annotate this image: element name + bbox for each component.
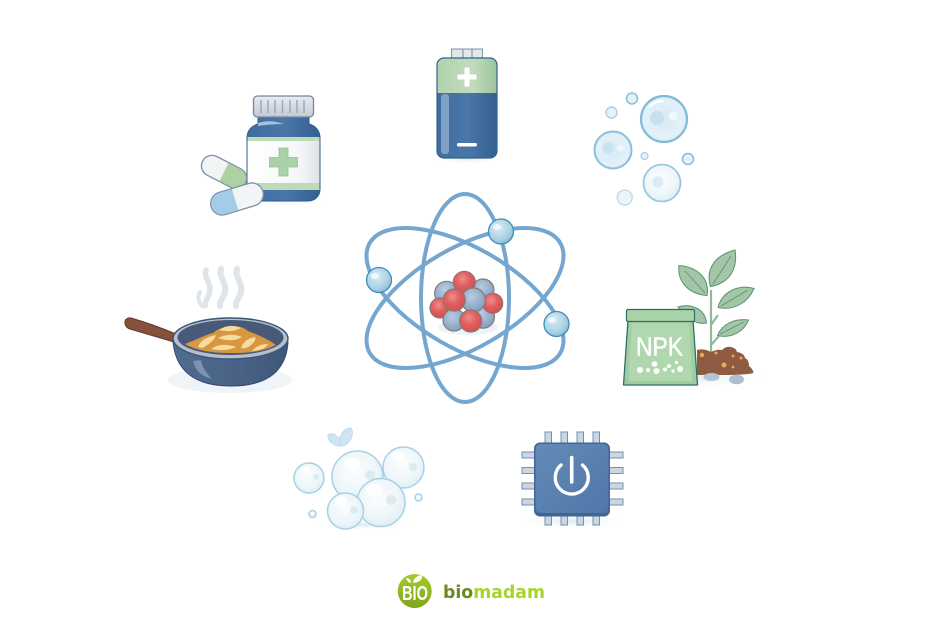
power symbol (555, 465, 588, 494)
icon: power chip (522, 432, 623, 528)
icon: soap bubbles cluster (294, 428, 424, 530)
orbits (345, 194, 585, 402)
handle (125, 318, 176, 342)
icon: medicine bottle with capsules (198, 96, 326, 218)
soil mound (697, 347, 754, 375)
icon: atom central diagram (345, 194, 585, 402)
NPK label: NPK (636, 332, 684, 362)
icon: NPK fertilizer bag with plant (614, 250, 770, 388)
icon: floating bubbles (594, 93, 694, 205)
nucleus (430, 271, 503, 335)
pan body (173, 342, 288, 386)
logo wordmark: biomadam (443, 583, 545, 603)
small leaf-shaped bubbles (328, 428, 352, 446)
plant stem and leaves (678, 250, 754, 352)
icon: frying pan with food and steam (125, 269, 292, 393)
logo badge (398, 574, 432, 608)
logo badge: BIO (402, 583, 428, 605)
bag (624, 320, 698, 385)
chip pins (522, 432, 623, 525)
electrons (366, 219, 569, 336)
food (185, 326, 276, 353)
steam (199, 269, 241, 306)
logo: biomadam (398, 574, 545, 608)
icon: battery (435, 49, 499, 164)
